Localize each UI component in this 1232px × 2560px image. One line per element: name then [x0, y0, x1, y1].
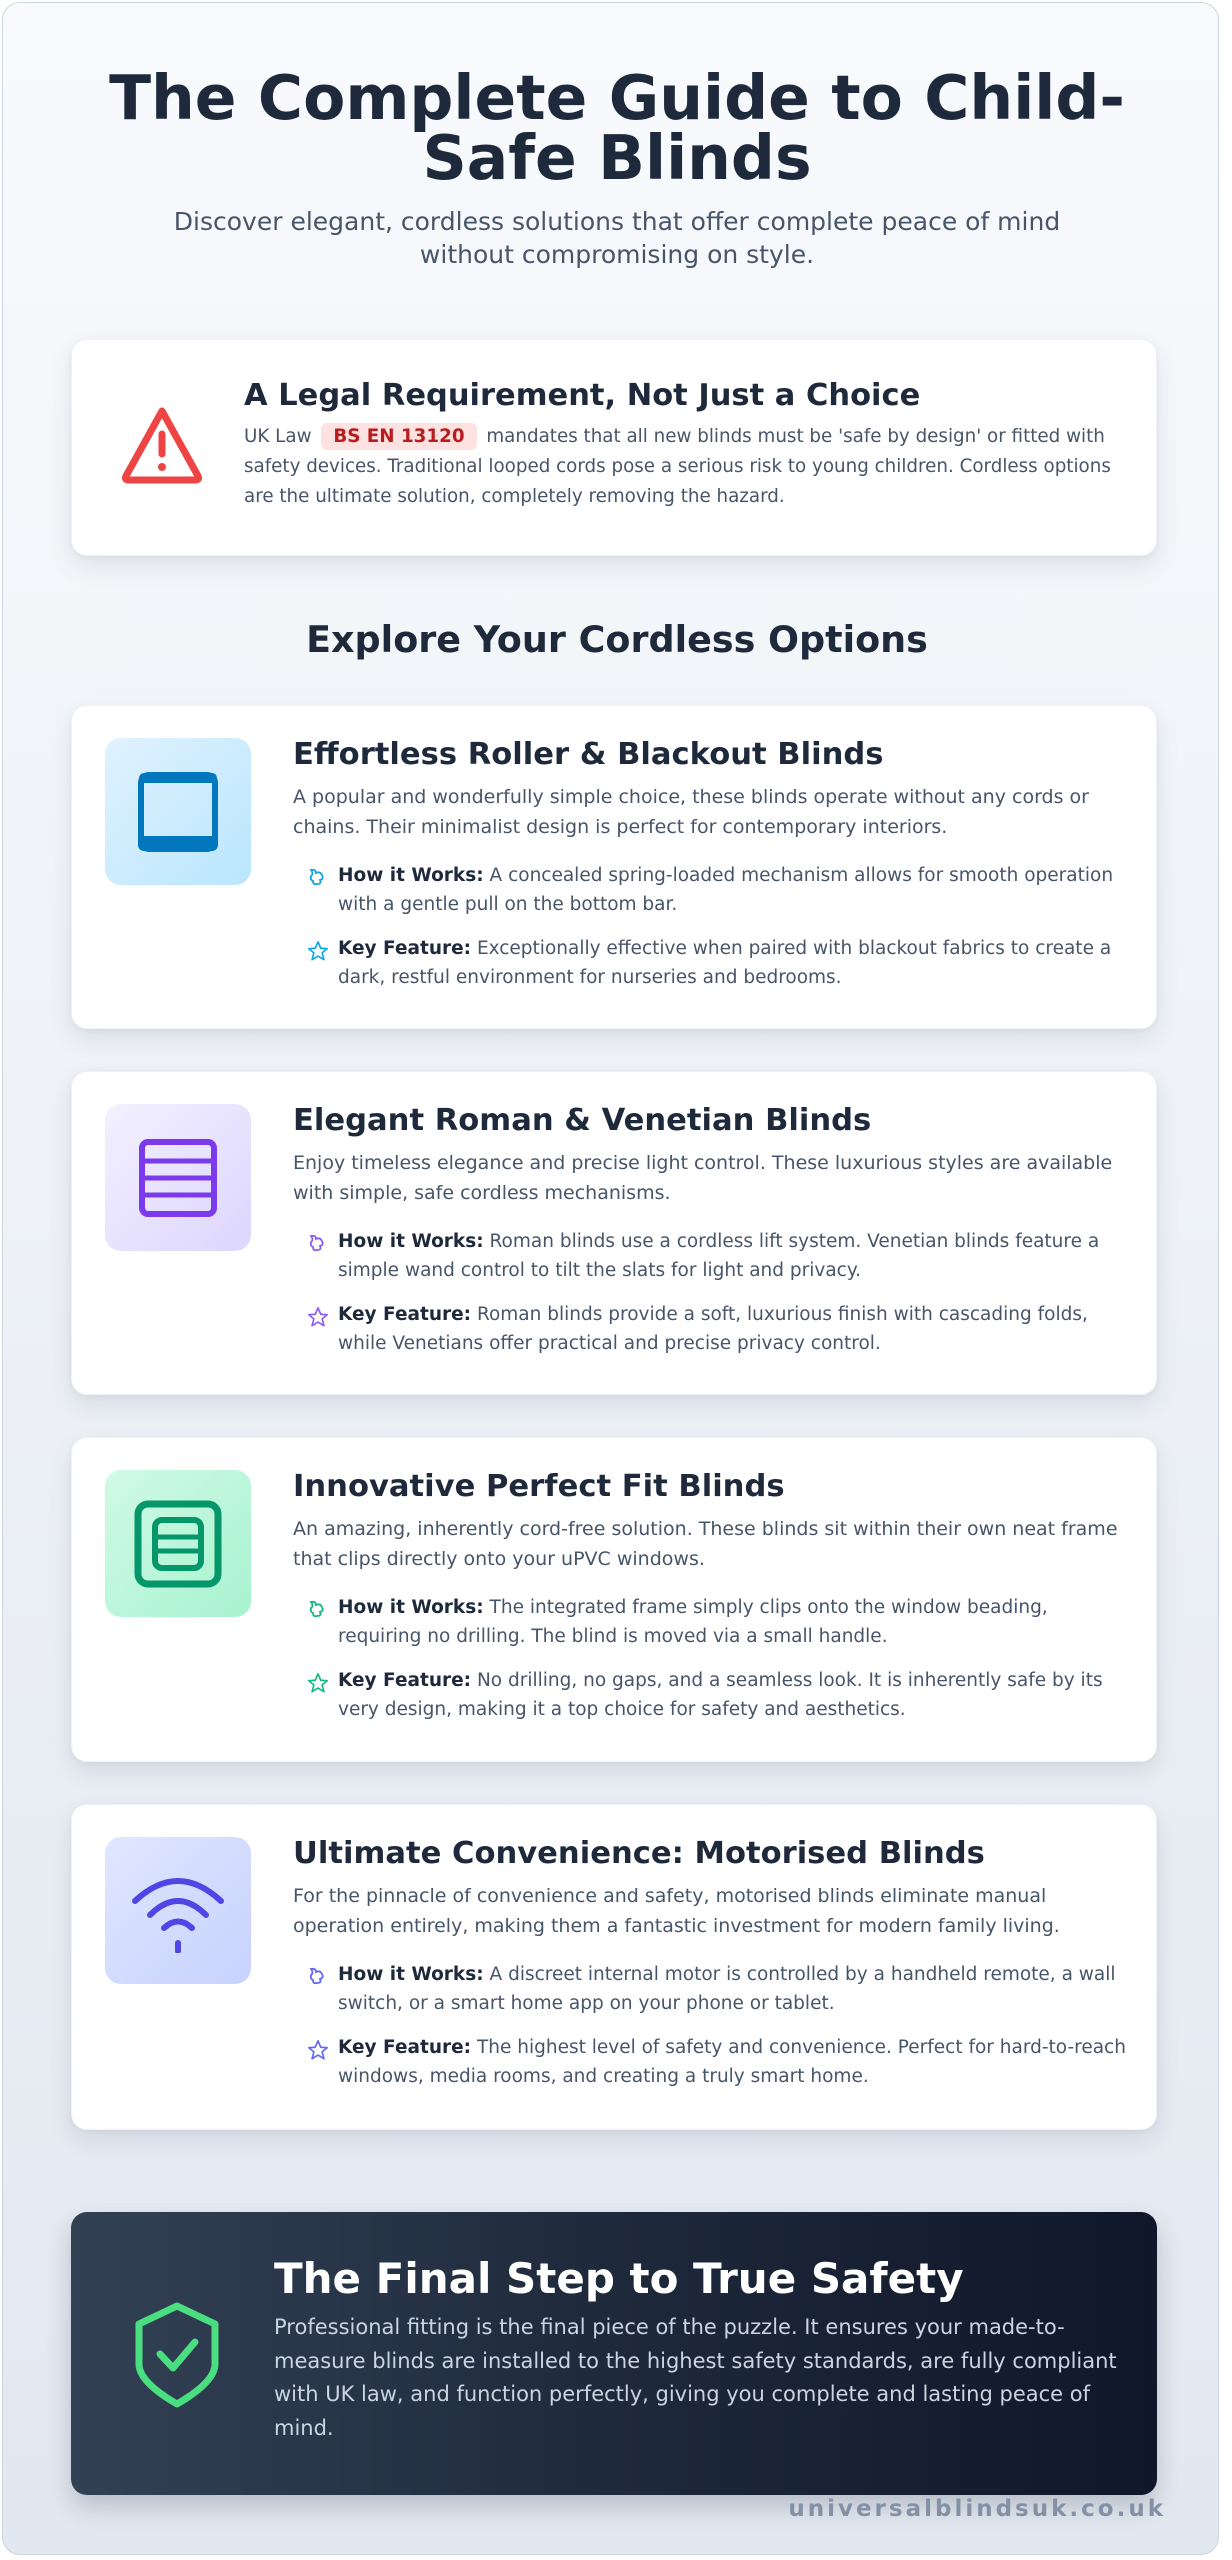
bullet: key feature: Key Feature: Exceptionally effective when paired with blackout fabrics to create a dark, restful environment for nurseries and bedrooms. [338, 938, 1111, 988]
icon: roller blind [105, 738, 251, 885]
text: final body: Professional fitting is the final piece of the puzzle. It ensures your made-to-measure blinds are installed to the highest safety standards, are fully compliant with UK law, and function perfectly, giving you complete and lasting peace of mind. [274, 2315, 1117, 2440]
heading: roller: Effortless Roller & Blackout Blinds [293, 737, 883, 772]
bullet: how it works: How it Works: Roman blinds use a cordless lift system. Venetian blinds feature a simple wand control to tilt the slats for light and privacy. [338, 1231, 1099, 1280]
heading: legal requirement: A Legal Requirement, Not Just a Choice [244, 378, 920, 413]
panel: final step [71, 2212, 1157, 2495]
icon: venetian slats [105, 1104, 251, 1251]
subtitle: Discover elegant, cordless solutions that offer complete peace of mind [174, 207, 1060, 236]
text: legal body: UK Law BS EN 13120 mandates that all new blinds must be 'safe by design' or fitted with safety devices. Traditional looped cords pose a serious risk to young children. Cordless options are the ultimate solution, completely removing the hazard. [244, 426, 1111, 507]
heading: explore options: Explore Your Cordless Options [306, 618, 928, 661]
bullet: key feature: Key Feature: Roman blinds provide a soft, luxurious finish with cascading folds, while Venetians offer practical and precise privacy control. [338, 1304, 1088, 1354]
heading: roman: Elegant Roman & Venetian Blinds [293, 1103, 871, 1138]
panel: perfect fit [71, 1437, 1157, 1762]
heading: motorised: Ultimate Convenience: Motorised Blinds [293, 1836, 985, 1871]
bullet: key feature: Key Feature: The highest level of safety and convenience. Perfect for hard-to-reach windows, media rooms, and creating a truly smart home. [338, 2037, 1126, 2086]
panel: roman and venetian [71, 1071, 1157, 1395]
text: motorised desc: For the pinnacle of convenience and safety, motorised blinds eliminate manual operation entirely, making them a fantastic investment for modern family living. [293, 1885, 1060, 1936]
title [109, 62, 1125, 194]
panel: legal requirement alert [71, 339, 1157, 556]
bullet: how it works: How it Works: A discreet internal motor is controlled by a handheld remote, a wall switch, or a smart home app on your phone or tablet. [338, 1964, 1116, 2014]
icon: framed blind [105, 1470, 251, 1617]
title: Safe Blinds [422, 122, 812, 194]
panel: roller blinds [71, 705, 1157, 1029]
subtitle: without compromising on style. [420, 240, 814, 269]
text: perfect fit desc: An amazing, inherently cord-free solution. These blinds sit within their own neat frame that clips directly onto your uPVC windows. [293, 1518, 1118, 1570]
title: The Complete Guide to Child- [109, 62, 1125, 134]
text: roman desc: Enjoy timeless elegance and precise light control. These luxurious styles are available with simple, safe cordless mechanisms. [293, 1152, 1112, 1204]
heading: perfect fit: Innovative Perfect Fit Blinds [293, 1469, 785, 1504]
bullet: how it works: How it Works: A concealed spring-loaded mechanism allows for smooth operation with a gentle pull on the bottom bar. [338, 865, 1113, 914]
subtitle [174, 207, 1060, 269]
heading: final step: The Final Step to True Safety [274, 2254, 964, 2303]
bullet: key feature: Key Feature: No drilling, no gaps, and a seamless look. It is inherently safe by its very design, making it a top choice for safety and aesthetics. [338, 1670, 1103, 1720]
watermark: universalblindsuk.co.uk [788, 2496, 1166, 2522]
bullet: how it works: How it Works: The integrated frame simply clips onto the window beading, requiring no drilling. The blind is moved via a small handle. [338, 1597, 1048, 1646]
icon: wireless signal [105, 1837, 251, 1984]
icon: shield check [136, 2302, 218, 2408]
text: roller desc: A popular and wonderfully simple choice, these blinds operate without any cords or chains. Their minimalist design is perfect for contemporary interiors. [293, 786, 1089, 838]
panel: motorised [71, 1804, 1157, 2130]
icon: warning triangle [122, 408, 202, 484]
